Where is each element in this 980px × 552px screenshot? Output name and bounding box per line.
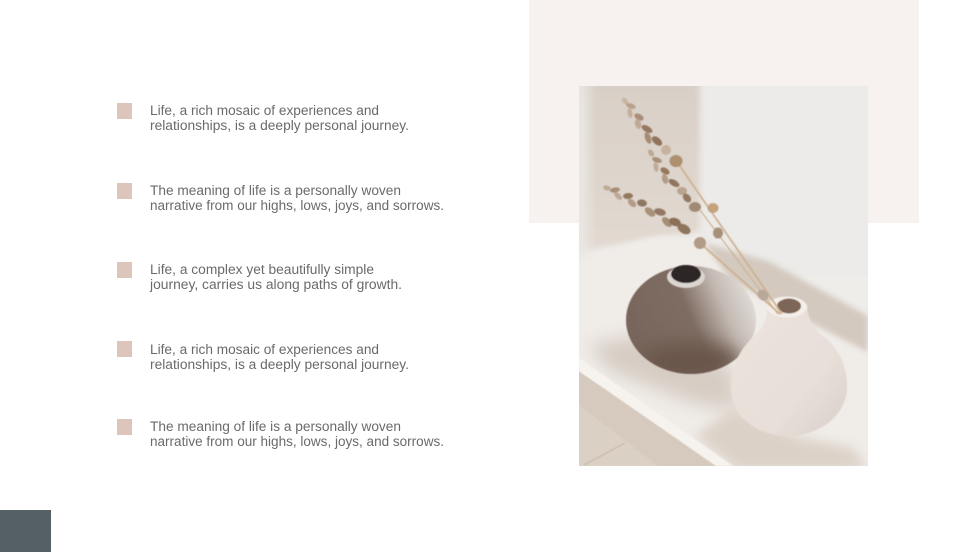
floor <box>579 372 730 466</box>
item 1 <box>117 103 409 133</box>
shadow under white vase <box>695 408 868 470</box>
corner block <box>0 510 51 552</box>
item 3: journey, carries us along paths of growth. <box>149 277 402 292</box>
item 2: narrative from our highs, lows, joys, and sorrows. <box>150 198 444 213</box>
bullet list <box>117 103 444 449</box>
dark vase <box>626 266 756 382</box>
photo: two ceramic vases with dried lavender <box>570 80 875 470</box>
lavender stems <box>677 162 782 314</box>
item 5: narrative from our highs, lows, joys, and sorrows. <box>150 434 444 449</box>
tray front side <box>579 372 591 380</box>
item 2 <box>117 183 444 213</box>
tray white edge <box>579 358 733 466</box>
white vase <box>731 299 847 436</box>
item 3: Life, a complex yet beautifully simple <box>150 262 374 277</box>
floor tile lines <box>584 443 625 465</box>
lavender spike 1 <box>621 96 682 167</box>
lavender spike 2 <box>647 148 718 213</box>
item 3 <box>117 262 402 292</box>
lavender spike 3 <box>602 185 771 303</box>
item 2: The meaning of life is a personally woven <box>150 183 401 198</box>
item 4 <box>117 341 409 372</box>
dark vase neck <box>667 265 705 288</box>
item 1: relationships, is a deeply personal journey. <box>150 118 409 133</box>
item 4: relationships, is a deeply personal journey. <box>150 357 409 372</box>
item 5: The meaning of life is a personally woven <box>150 419 401 434</box>
white vase rim <box>767 296 807 318</box>
shadow under dark vase <box>588 335 740 412</box>
item 4: Life, a rich mosaic of experiences and <box>150 342 379 357</box>
item 1: Life, a rich mosaic of experiences and <box>150 103 379 118</box>
tray far rim shadow <box>705 243 868 352</box>
item 5 <box>117 419 444 449</box>
panel: blush background block <box>529 0 919 223</box>
